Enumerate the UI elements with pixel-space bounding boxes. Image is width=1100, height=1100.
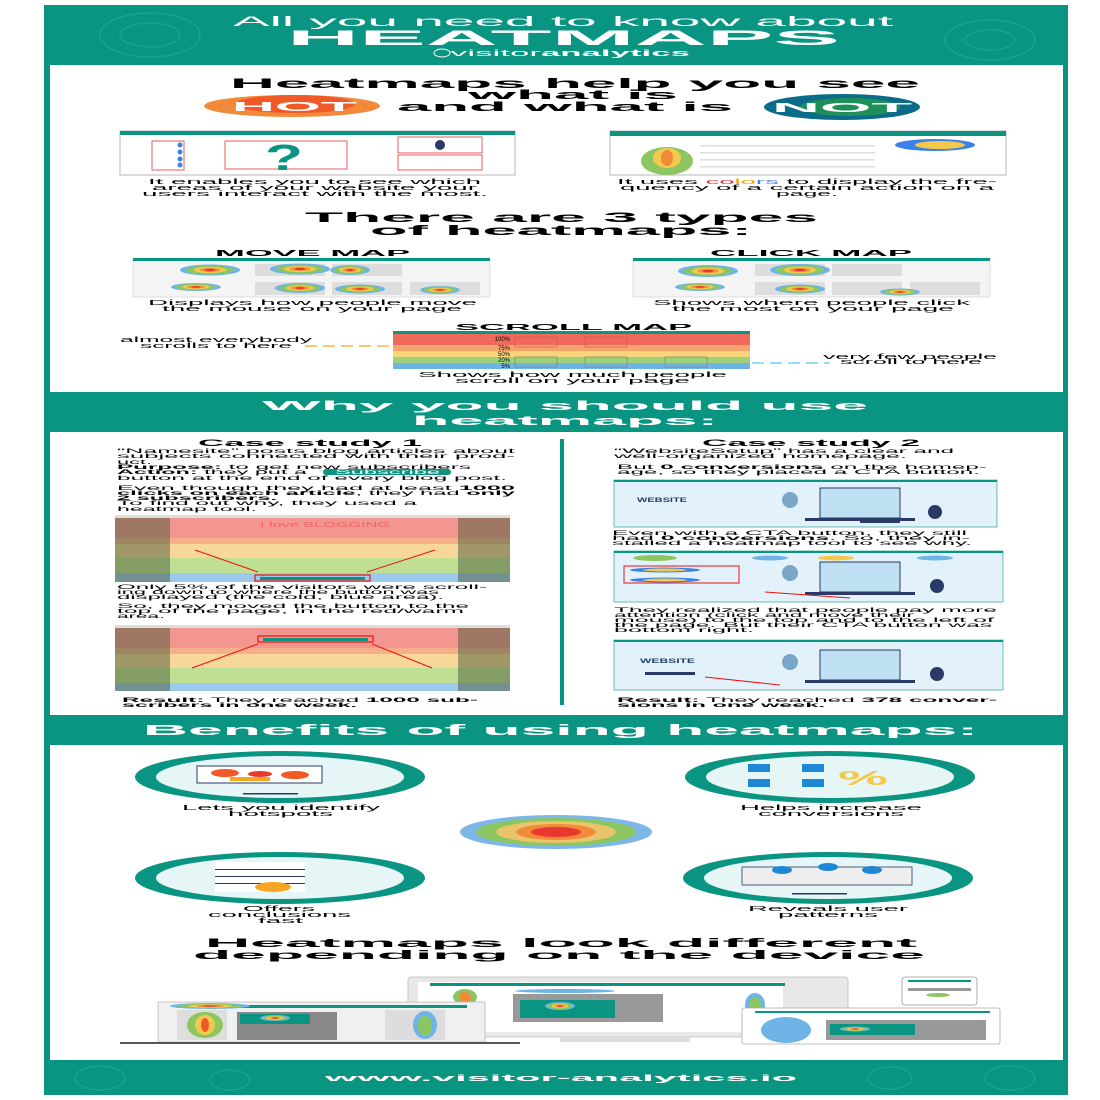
case study 1: 2 subscribers. <box>117 495 278 502</box>
caption: scroll <box>418 372 727 385</box>
arrow: blue dashed <box>752 362 830 364</box>
text: they realized: They realized that people pay more <box>614 607 998 614</box>
benefit: patterns <box>683 852 973 919</box>
header: All you need to know about <box>233 13 893 29</box>
scroll map: 5% <box>501 364 511 370</box>
text: only 5%: area. <box>117 613 166 620</box>
heading: 3 types <box>305 209 819 238</box>
case study 1: button at the end of every blog post. <box>117 475 508 482</box>
heading: device: depending on the device <box>193 948 927 962</box>
heading: hot and not: Heatmaps help you see <box>230 75 921 91</box>
label: almost everybody <box>120 337 314 350</box>
text: only 5%: ing down to where the button was <box>117 589 441 596</box>
result 1: Result: They reached 1000 sub- <box>122 697 478 704</box>
case study 1: heatmap tool. <box>117 506 258 513</box>
heading: why: heatmaps: <box>412 413 718 428</box>
text: even with CTA: had 0 conversions . So, they in- <box>612 535 970 542</box>
heading: device: Heatmaps look different <box>205 936 917 950</box>
label: very few: very few people <box>823 354 997 361</box>
header: visitor analytics <box>450 48 690 58</box>
caption: colors: quency of a certain action on a <box>620 185 994 192</box>
heading: 3 types: There are 3 types <box>305 209 819 225</box>
heading: hot and not <box>204 75 921 120</box>
label: very few: scroll to here <box>840 359 982 366</box>
benefit: hotspots: hotspots <box>228 811 335 818</box>
heading: why: Why you should use <box>262 398 868 413</box>
case study 2: “WebsiteSetup” has a clear and <box>614 448 955 455</box>
caption: scroll: scroll on your page <box>455 378 690 385</box>
captions: move/click: Shows where people click <box>653 300 972 307</box>
caption: colors: page. <box>776 191 838 198</box>
case study 1: clicks on each article , they had only <box>117 490 516 497</box>
case study 2: well-organized homepage. <box>610 453 908 460</box>
benefit: conversions <box>685 751 975 818</box>
caption: enables: areas of your website your <box>152 185 480 192</box>
panel: intro <box>50 65 1063 392</box>
benefit: conversions: conversions <box>758 811 906 818</box>
case study 1: “Namesite” posts blog articles about <box>117 448 516 455</box>
footer: www.visitor-analytics.io <box>320 1073 799 1083</box>
text: only 5%: top of the page, in the red/warm <box>117 608 464 615</box>
icon: central heat blob <box>460 815 652 849</box>
case study 1: uct. <box>117 459 153 466</box>
text: they realized: attention (click and move their <box>614 612 917 619</box>
text: they realized: bottom right. <box>614 627 755 634</box>
text: only 5%: displayed (the cold, blue area). <box>117 594 445 601</box>
website image 2 <box>614 551 1003 602</box>
scroll map: 20% <box>498 358 511 364</box>
move map: MOVE MAP <box>215 249 413 258</box>
benefit: conversions: Helps increase <box>740 805 922 812</box>
benefit: hotspots: Lets you identify <box>182 805 382 812</box>
caption: colors: It uses co lo rs to display the fre- <box>617 179 1000 186</box>
label: almost everybody: almost everybody <box>120 337 314 344</box>
result 2: sions in one week. <box>617 702 826 709</box>
heading: benefits: Benefits of using heatmaps: <box>143 722 978 739</box>
screenshot: colored heatmap page <box>610 131 1006 175</box>
website image 1 <box>614 480 997 527</box>
heading: hot and not: and what is <box>397 99 733 114</box>
case study 1: To find out why, they used a <box>117 500 418 507</box>
scroll map: 50% <box>498 352 511 358</box>
header <box>100 13 1035 60</box>
heatmap image 2 <box>115 625 510 691</box>
heading: hot and not: what is <box>463 87 678 102</box>
case study 2: But 0 conversions on the homep- <box>617 464 987 471</box>
case study 1: Action: they put a <box>117 469 308 476</box>
case study 2: Case study 2 <box>702 438 920 448</box>
result 2: Result: They reached 378 conver- <box>617 697 997 704</box>
result 1 <box>122 697 478 709</box>
label: almost everybody: scrolls to here <box>140 343 292 350</box>
devices illustration <box>120 977 1000 1044</box>
case study 1: Subscribe <box>335 470 443 476</box>
screenshot: question page <box>120 131 515 178</box>
captions: move/click: Displays how people move <box>148 300 477 307</box>
benefit: conclusions: Offers <box>243 906 317 913</box>
heading: 3 types: of heatmaps: <box>370 222 752 238</box>
benefit: conclusions <box>135 852 425 925</box>
heading: hot and not: HOT <box>232 99 357 114</box>
text: they realized <box>614 607 998 634</box>
text: even with CTA <box>612 530 973 547</box>
arrow: orange dashed <box>305 345 390 347</box>
case study 1: Even though they had at least 1000 <box>117 485 516 492</box>
case study 1: subjects connected with their prod- <box>117 453 515 460</box>
caption: colors <box>617 179 1000 198</box>
header: HEATMAPS <box>287 27 840 50</box>
scroll map <box>393 323 750 370</box>
click map <box>633 249 990 297</box>
case study 2: age, so they placed a CTA button. <box>617 469 981 476</box>
label: very few <box>823 354 997 366</box>
result 1: scribers in one week. <box>122 702 358 709</box>
click map: CLICK MAP <box>710 249 915 258</box>
captions: move/click: the most on your page <box>672 306 954 313</box>
caption: enables: It enables you to see which <box>148 179 481 186</box>
move map <box>133 249 490 297</box>
benefit: conversions: % <box>838 768 889 790</box>
text: only 5% <box>117 584 487 620</box>
heatmap image 1 <box>115 515 510 582</box>
text: they realized: the page. But their CTA button was <box>614 622 995 629</box>
case study 1: Purpose: to get new subscribers <box>117 464 474 471</box>
heading: device <box>193 936 927 962</box>
scroll map: 100% <box>495 337 511 343</box>
website image 3 <box>614 640 1003 690</box>
scroll map: SCROLL MAP <box>455 323 695 332</box>
text: only 5%: So, they moved the button to the <box>117 603 470 610</box>
scroll map: 75% <box>498 346 511 352</box>
text: even with CTA: stalled a heatmap tool to see why. <box>612 540 973 547</box>
case study 1 <box>117 438 516 513</box>
captions: move/click: the mouse on your page <box>162 306 462 313</box>
caption: enables: users interact with the most. <box>142 191 488 198</box>
case study 2 <box>610 438 987 476</box>
website image 3: WEBSITE <box>640 659 695 665</box>
benefit: conclusions: fast <box>258 918 303 925</box>
panel: case studies <box>50 432 1063 715</box>
caption: enables <box>142 179 488 198</box>
heatmap image 1: I love BLOGGING <box>260 522 390 529</box>
panel: benefits and devices <box>50 745 1063 1060</box>
text: only 5%: Only 5% of the visitors were scroll- <box>117 584 487 591</box>
case study 1: Case study 1 <box>198 438 422 448</box>
text: even with CTA: Even with a CTA button, they still <box>612 530 969 537</box>
benefit: conclusions: conclusions <box>208 912 353 919</box>
website image 1: WEBSITE <box>637 498 687 504</box>
benefit: hotspots <box>135 751 425 818</box>
benefit: patterns: patterns <box>778 912 880 919</box>
benefit: patterns: Reveals user <box>748 906 911 913</box>
footer <box>75 1066 1035 1090</box>
result 2 <box>617 697 997 709</box>
captions: move/click <box>148 300 972 313</box>
heading: hot and not: NOT <box>772 100 912 115</box>
screenshot: question page: ? <box>265 137 303 178</box>
caption: scroll: Shows how much people <box>418 372 727 379</box>
heading: why <box>262 398 868 428</box>
text: they realized: mouse) to the top and to the left of <box>614 617 995 624</box>
